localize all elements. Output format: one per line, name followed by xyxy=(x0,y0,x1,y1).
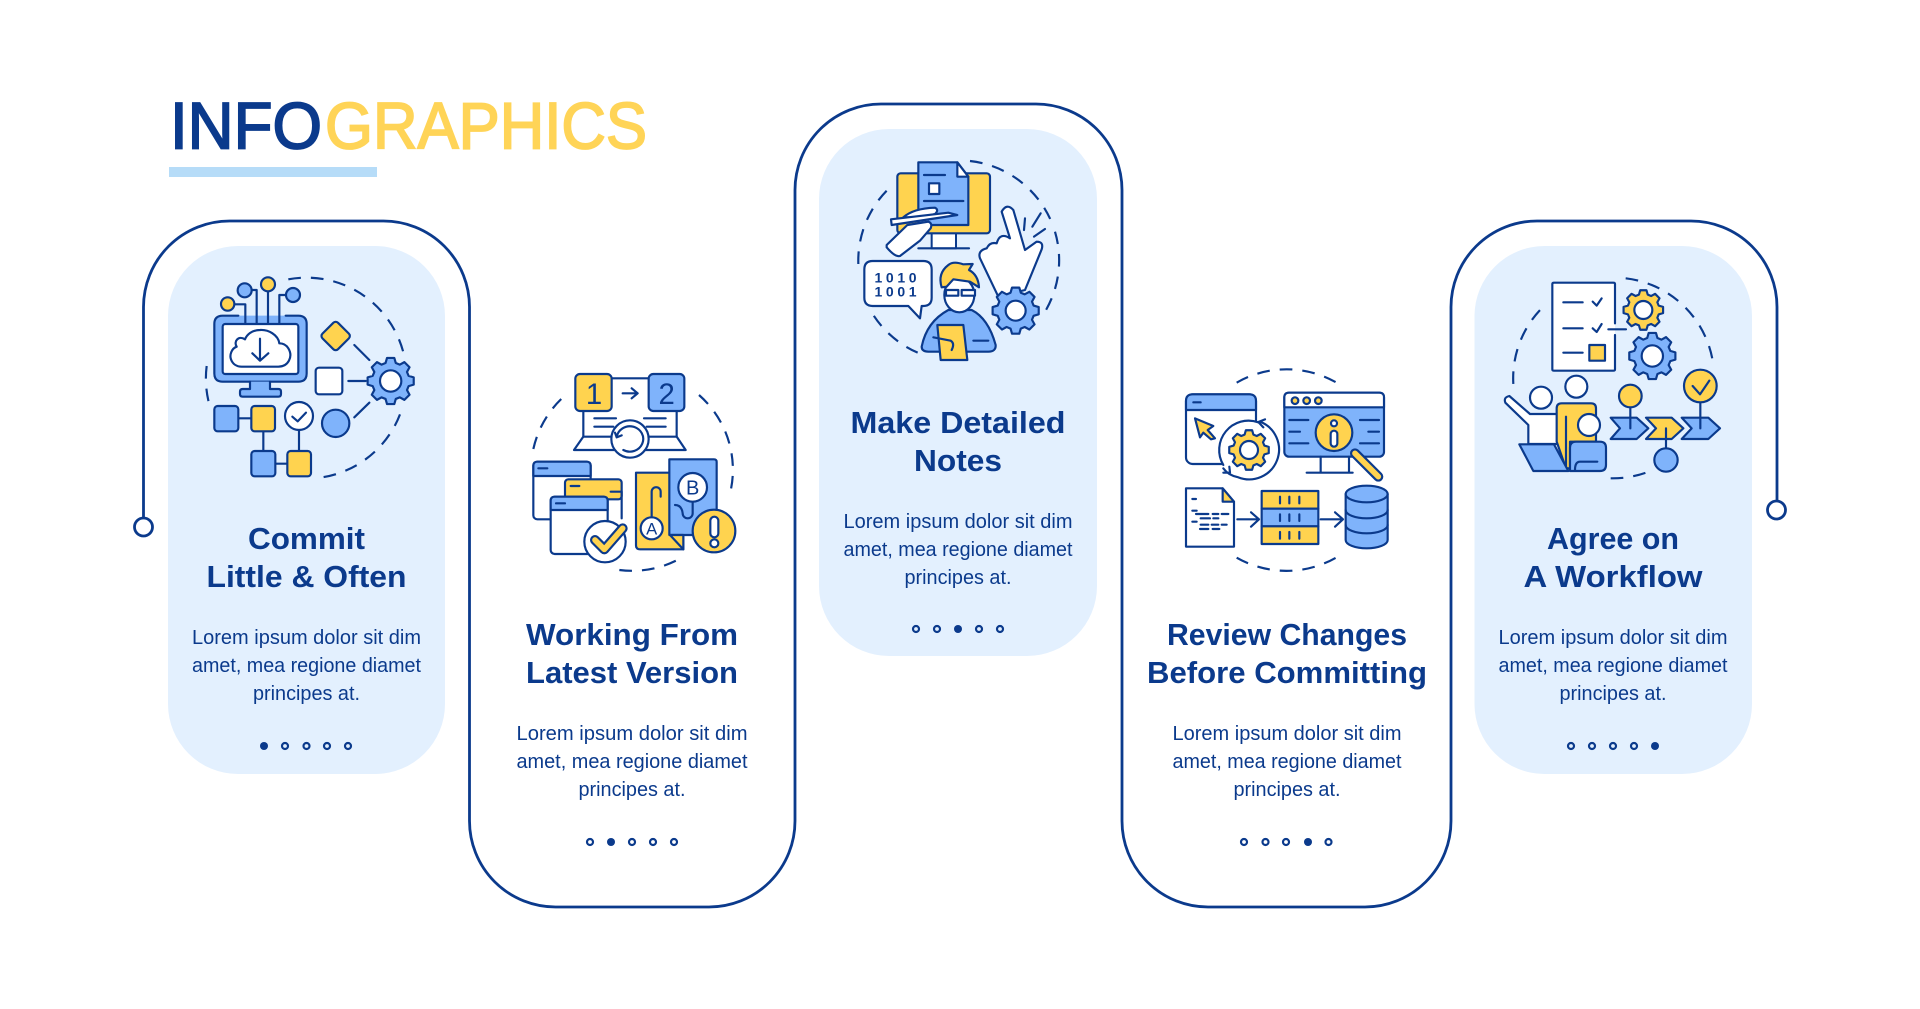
heading: Latest Version xyxy=(526,655,738,690)
heading xyxy=(1524,521,1703,594)
heading xyxy=(526,617,738,690)
body text: Lorem ipsum dolor sit dim xyxy=(844,511,1072,533)
heading: Little & Often xyxy=(206,559,406,594)
title xyxy=(170,88,647,162)
body text: principes at. xyxy=(1560,683,1666,705)
heading: Working From xyxy=(526,617,738,652)
title: INFO xyxy=(170,88,322,162)
heading: Review Changes xyxy=(1167,617,1407,652)
body text xyxy=(1498,627,1728,705)
heading xyxy=(206,521,406,594)
title: GRAPHICS xyxy=(325,88,647,162)
body text: amet, mea regione diamet xyxy=(192,655,421,677)
icon: checklist, gears, team and process xyxy=(1505,278,1720,478)
icon: versions, windows and documents: A xyxy=(646,519,658,538)
heading: Notes xyxy=(914,443,1002,478)
body text: principes at. xyxy=(253,683,360,705)
body text: amet, mea regione diamet xyxy=(844,539,1073,561)
icon: monitor, cloud and flow xyxy=(206,277,414,477)
icon: notes, person and pointer: 1001 xyxy=(874,284,920,300)
body text xyxy=(516,723,748,801)
body text: Lorem ipsum dolor sit dim xyxy=(192,627,421,649)
heading: A Workflow xyxy=(1524,559,1703,594)
panel 4: review changes before committing xyxy=(1147,369,1427,846)
icon: windows, server and database xyxy=(1186,369,1388,571)
heading xyxy=(850,405,1066,478)
body text: amet, mea regione diamet xyxy=(1172,751,1402,773)
heading: Before Committing xyxy=(1147,655,1427,690)
body text: amet, mea regione diamet xyxy=(516,751,748,773)
body text: Lorem ipsum dolor sit dim xyxy=(1498,627,1728,649)
icon: versions, windows and documents: B xyxy=(686,477,699,499)
body text: Lorem ipsum dolor sit dim xyxy=(1172,723,1402,745)
heading: Make Detailed xyxy=(850,405,1066,440)
pagination dots xyxy=(260,742,351,750)
pagination dots xyxy=(1241,838,1332,846)
connecting outline frame xyxy=(134,104,1786,907)
icon: versions, windows and documents xyxy=(533,374,735,571)
panel 3: make detailed notes xyxy=(819,129,1097,656)
pagination dots xyxy=(587,838,677,846)
body text: Lorem ipsum dolor sit dim xyxy=(516,723,748,745)
pagination dots xyxy=(913,625,1003,633)
icon: notes, person and pointer xyxy=(858,161,1059,360)
icon: versions, windows and documents: 2 xyxy=(659,378,675,411)
body text: principes at. xyxy=(578,779,686,801)
heading xyxy=(1147,617,1427,690)
icon: notes, person and pointer: 1010 xyxy=(874,269,920,285)
heading: Commit xyxy=(248,521,365,556)
body text xyxy=(192,627,421,705)
icon: versions, windows and documents: 1 xyxy=(586,378,602,411)
body text xyxy=(844,511,1073,589)
body text: principes at. xyxy=(904,567,1012,589)
body text: principes at. xyxy=(1234,779,1340,801)
pagination dots xyxy=(1568,742,1659,750)
title underline xyxy=(169,167,377,177)
heading: Agree on xyxy=(1547,521,1679,556)
panel 2: working from latest version xyxy=(516,374,748,846)
panel 1: commit little and often xyxy=(168,246,445,774)
panel 5: agree on a workflow xyxy=(1474,246,1752,774)
body text: amet, mea regione diamet xyxy=(1498,655,1728,677)
body text xyxy=(1172,723,1402,801)
